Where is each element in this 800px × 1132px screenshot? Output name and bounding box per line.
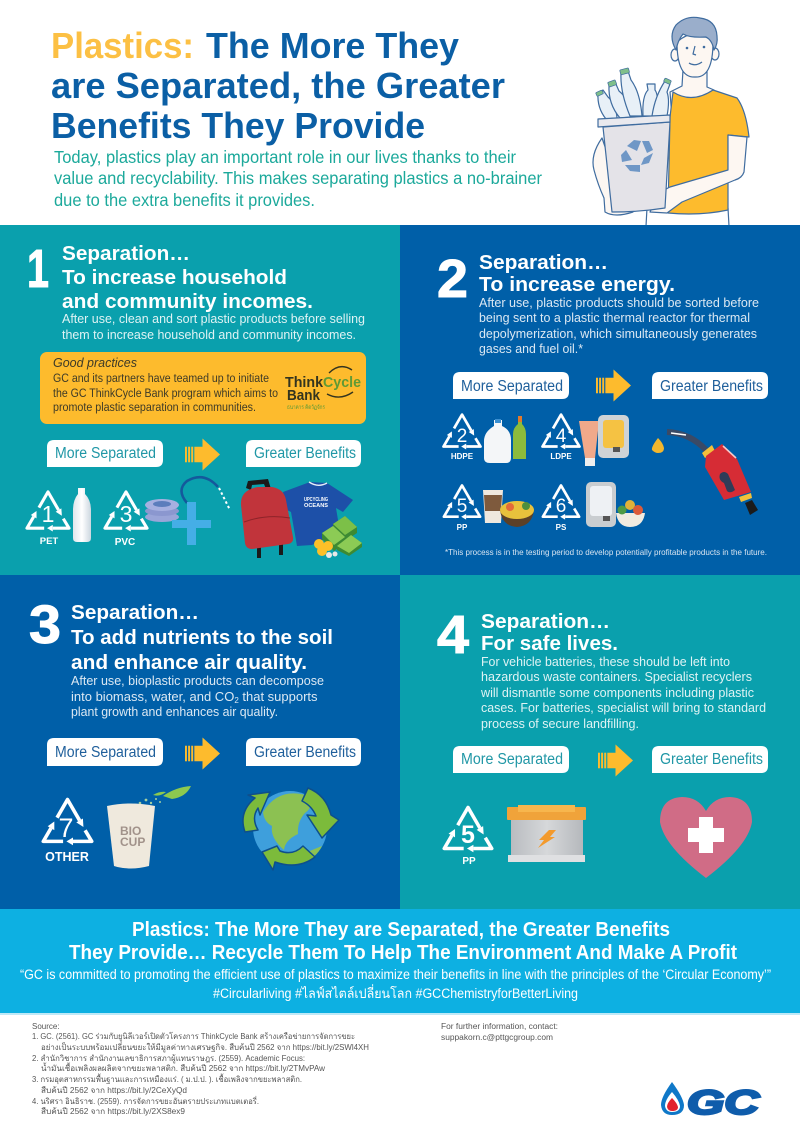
icon: LDPE recycling code	[543, 415, 579, 461]
icon: PVC recycling code: PVC	[115, 537, 135, 548]
panel 4 number: 4	[437, 605, 469, 665]
sources: อย่างเป็นระบบพร้อมเปลี่ยนขยะให้มีมูลค่าทางเศรษฐกิจ. สืบค้นปี 2562 จาก https://bit.ly/2SWl4XH	[41, 1041, 369, 1053]
sources: 2. สำนักวิชาการ สำนักงานเลขาธิการสภาผู้แทนราษฎร. (2559). Academic Focus:	[32, 1054, 305, 1064]
label: greater benefits	[246, 440, 361, 467]
icon: PVC recycling code	[105, 492, 147, 548]
icon: PET recycling code: 1	[42, 501, 54, 527]
panel 1 number: 1	[27, 239, 49, 299]
callout: good practices: the GC ThinkCycle Bank program which aims to	[53, 386, 278, 400]
label: more separated	[453, 746, 569, 773]
panel 2 body text	[479, 295, 759, 356]
icon: LDPE recycling code: 4	[556, 426, 567, 447]
panel 4 heading: Separation…	[481, 611, 610, 633]
icon: milk jug and green bottle	[484, 416, 526, 463]
arrow	[596, 369, 631, 402]
icon: LDPE recycling code: LDPE	[550, 452, 572, 461]
panel 4 body text: hazardous waste containers. Specialist recyclers	[481, 669, 752, 684]
panel 2 heading: Separation…	[479, 252, 608, 274]
arrow	[185, 438, 220, 471]
intro text: Today, plastics play an important role in our lives thanks to their	[54, 147, 516, 167]
icon: blue t-shirt: OCEANS	[304, 503, 329, 509]
panel 2 heading: To increase energy.	[479, 274, 675, 296]
panel 4 heading: For safe lives.	[481, 633, 618, 655]
panel 1 heading	[62, 243, 313, 313]
icon: other recycling code: 7	[58, 813, 74, 843]
icon: PS recycling code: PS	[556, 523, 567, 532]
panel 4 body text: process of secure landfilling.	[481, 716, 639, 731]
icon: red backpack	[241, 479, 293, 558]
panel 4: safe lives	[400, 575, 800, 909]
icon: coffee cup and food bowl	[483, 490, 534, 527]
label: more separated: More Separated	[461, 751, 563, 768]
contact information: For further information, contact:	[441, 1022, 558, 1031]
logo: ThinkCycle Bank: ธนาคาร คิดวัฏจักร	[287, 404, 326, 411]
contact information: suppakorn.c@pttgcgroup.com	[441, 1033, 553, 1042]
label: more separated: More Separated	[55, 744, 156, 761]
icon: PET recycling code	[27, 492, 69, 547]
label: more separated	[47, 440, 163, 467]
icon: PVC recycling code: 3	[120, 501, 132, 527]
title: Benefits They Provide	[51, 105, 425, 146]
sources: 1. GC. (2561). GC ร่วมกับยูนิลีเวอร์เปิดตัวโครงการ ThinkCycle Bank สร้างเครือข่ายการจัดการขยะ	[32, 1031, 355, 1042]
panel 1 heading: and community incomes.	[62, 291, 313, 313]
icon: bio cup with green flakes: CUP	[120, 835, 145, 849]
icon: PVC hose and pipes	[145, 477, 230, 545]
icon: HDPE recycling code: HDPE	[451, 452, 474, 461]
icon: PP recycling code: 5	[457, 496, 467, 517]
logo: GC	[661, 1082, 760, 1122]
panel 2 body text: gases and fuel oil.*	[479, 341, 583, 356]
intro text	[54, 147, 542, 210]
panel 4 heading	[481, 611, 618, 655]
panel 1 body text: After use, clean and sort plastic products before selling	[62, 311, 365, 326]
banner heading: They Provide… Recycle Them To Help The Environment And Make A Profit	[69, 941, 737, 964]
sources: Source:	[32, 1022, 60, 1031]
panel 2 number: 2	[437, 249, 468, 309]
icon: PP recycling code: 5	[461, 821, 475, 849]
logo: ThinkCycle Bank: Cycle	[323, 374, 361, 391]
sources	[32, 1022, 369, 1116]
panel 1 heading: Separation…	[62, 243, 190, 265]
icon: PP recycling code: PP	[457, 523, 468, 532]
panel 1 body text: them to increase household and community incomes.	[62, 327, 356, 342]
callout: good practices: promote plastic separation in communities.	[53, 400, 256, 414]
footnote: *This process is in the testing period to develop potentially profitable products in the future.	[445, 547, 767, 557]
icon: PS recycling code: 6	[556, 496, 566, 517]
label: greater benefits: Greater Benefits	[254, 744, 356, 761]
panel 4 body text: will dismantle some components including plastic	[480, 685, 754, 700]
panel 2: increase energy	[400, 225, 800, 575]
label: more separated	[47, 738, 163, 766]
panel 3 body text: that supports	[239, 689, 318, 704]
icon: fuel nozzle	[652, 432, 758, 515]
panel 3 heading: To add nutrients to the soil	[71, 627, 333, 649]
label: greater benefits	[652, 372, 768, 399]
callout: good practices: GC and its partners have teamed up to initiate	[53, 371, 269, 385]
panel 4 body text: For vehicle batteries, these should be left into	[481, 654, 730, 669]
panel 2 body text: After use, plastic products should be sorted before	[479, 295, 759, 310]
panel 1 body text	[62, 311, 365, 342]
icon: other recycling code: OTHER	[45, 850, 89, 864]
intro text: due to the extra benefits it provides.	[54, 190, 315, 210]
banner heading	[69, 918, 737, 964]
panel 3 heading: Separation…	[71, 602, 199, 624]
panel 3: soil nutrients and air quality	[0, 575, 400, 909]
intro text: value and recyclability. This makes separating plastics a no-brainer	[54, 168, 542, 188]
panel 1 heading: To increase household	[62, 267, 287, 289]
panel 3 body text: plant growth and enhances air quality.	[71, 704, 278, 719]
panel 2 heading	[479, 252, 675, 296]
icon: PP recycling code: PP	[462, 856, 476, 867]
callout: good practices: Good practices	[53, 355, 137, 370]
icon: plastic bottle	[73, 488, 91, 542]
contact information	[441, 1022, 558, 1042]
label: greater benefits: Greater Benefits	[660, 751, 763, 768]
panel 4 body text	[480, 654, 766, 731]
panel 2 body text: being sent to a plastic thermal reactor for thermal	[479, 310, 750, 325]
icon: PS recycling code	[543, 485, 579, 532]
banner hashtags: #Circularliving #ไลฟ์สไตล์เปลี่ยนโลก #GCChemistryforBetterLiving	[213, 984, 578, 1001]
icon: PP recycling code	[444, 807, 492, 867]
panel 3 body text	[71, 673, 324, 719]
panel 4 body text: cases. For batteries, specialist will bring to standard	[481, 700, 766, 715]
title	[51, 25, 505, 146]
icon: blue t-shirt	[283, 482, 353, 546]
closing banner	[0, 909, 800, 1015]
icon: tube and food tray	[579, 415, 629, 466]
icon: earth with recycling arrows	[243, 788, 339, 870]
arrow	[185, 737, 220, 770]
title: are Separated, the Greater	[51, 65, 505, 106]
title: Plastics:	[51, 25, 194, 66]
icon: PP recycling code	[444, 485, 480, 532]
sources: สืบค้นปี 2562 จาก https://bit.ly/2XS8ex9	[41, 1107, 186, 1116]
sources: 3. กรมอุตสาหกรรมพื้นฐานและการเหมืองแร่. ( ม.ป.ป. ). เชื้อเพลิงจากขยะพลาสติก.	[32, 1073, 302, 1084]
panel 3 body text: into biomass, water, and CO	[71, 689, 234, 704]
icon: bio cup with green flakes	[107, 786, 191, 868]
sources: น้ำมันเชื้อเพลิงผลผลิตจากขยะพลาสติก. สืบค้นปี 2562 จาก https://bit.ly/2TMvPAw	[41, 1062, 325, 1073]
panel 3 number: 3	[29, 595, 61, 655]
title: The More They	[206, 25, 459, 66]
arrow	[598, 744, 633, 777]
logo: GC: GC	[687, 1084, 760, 1122]
label: greater benefits: Greater Benefits	[254, 445, 356, 462]
illustration: man holding recycling bin	[593, 17, 749, 226]
icon: bio cup with green flakes: BIO	[120, 824, 141, 838]
sources: 4. นริศรา อินธิราช. (2559). การจัดการขยะอันตรายประเภทแบตเตอรี่.	[32, 1095, 259, 1106]
icon: blue t-shirt: UPCYCLING	[304, 497, 328, 503]
icon: foam tray and salad bowl	[586, 482, 645, 527]
logo: ThinkCycle Bank	[285, 367, 361, 411]
panel 3 heading: and enhance air quality.	[71, 652, 307, 674]
panel 3 heading	[71, 602, 333, 674]
icon: HDPE recycling code	[444, 415, 480, 461]
icon: money and coins	[314, 516, 362, 558]
callout: good practices	[40, 352, 366, 424]
logo: ThinkCycle Bank: Think	[285, 374, 324, 391]
icon: HDPE recycling code: 2	[457, 426, 467, 447]
icon: PET recycling code: PET	[40, 536, 58, 547]
label: greater benefits	[246, 738, 361, 766]
label: more separated: More Separated	[461, 378, 563, 395]
panel 3 body text: 2	[234, 696, 239, 705]
panel 3 body text: After use, bioplastic products can decompose	[71, 673, 324, 688]
label: more separated: More Separated	[55, 445, 156, 462]
icon: heart with plus	[660, 797, 752, 878]
panel 1: household and community incomes	[0, 225, 400, 575]
logo: ThinkCycle Bank: Bank	[287, 387, 321, 404]
label: greater benefits: Greater Benefits	[660, 378, 763, 395]
label: more separated	[453, 372, 569, 399]
banner heading: Plastics: The More They are Separated, the Greater Benefits	[132, 918, 670, 941]
sources: สืบค้นปี 2562 จาก https://bit.ly/2CeXyQd	[41, 1086, 187, 1095]
icon: car battery	[507, 805, 586, 862]
panel 2 body text: depolymerization, which simultaneously generates	[479, 326, 757, 341]
label: greater benefits	[652, 746, 768, 773]
icon: other recycling code	[43, 800, 92, 864]
